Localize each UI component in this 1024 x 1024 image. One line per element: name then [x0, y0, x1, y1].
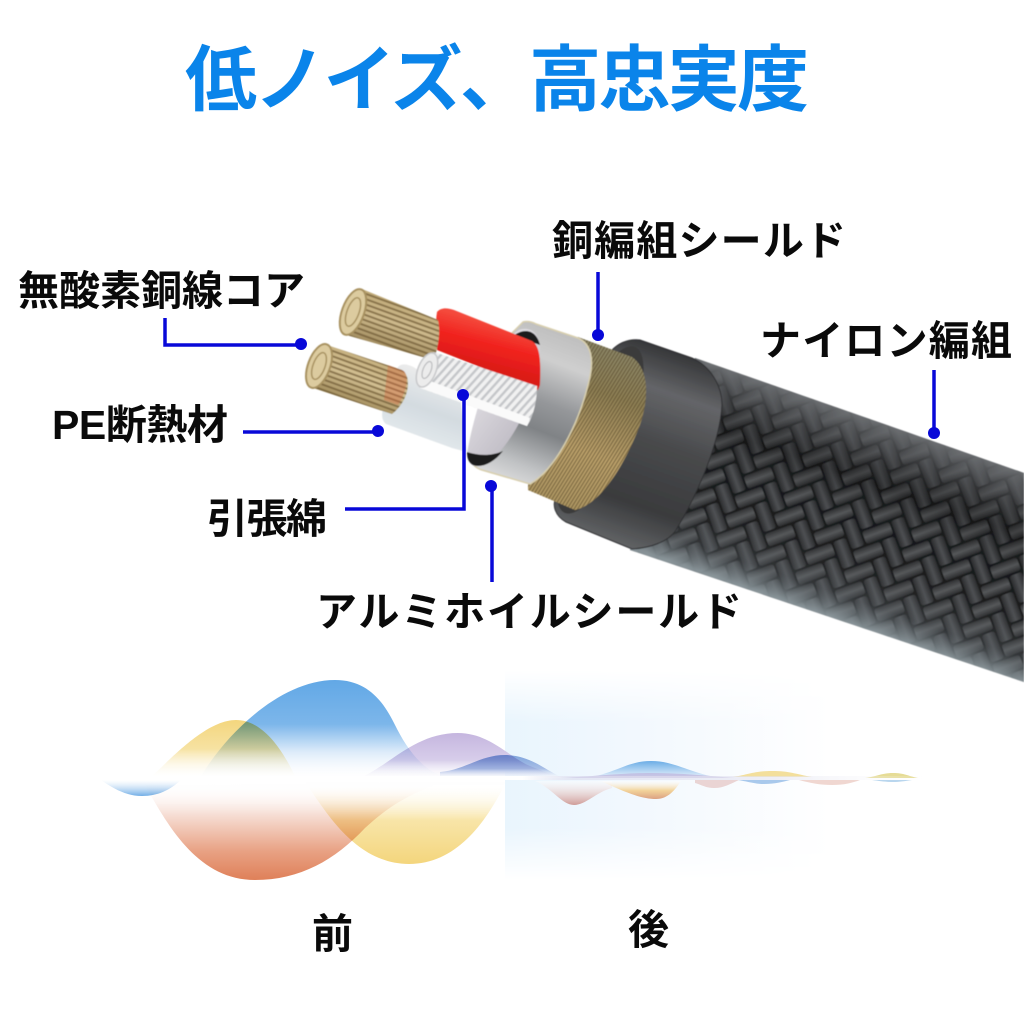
centre light streak	[100, 776, 945, 780]
gold conductor front	[301, 341, 408, 414]
sleeve opening	[539, 336, 661, 524]
gold conductor rear	[334, 286, 439, 360]
cable illustration	[301, 286, 1024, 682]
label: PE insulation	[52, 402, 384, 448]
label: tensile cotton: 引張綿	[207, 496, 327, 542]
label: copper braid shield	[552, 218, 846, 341]
copper braid shield	[528, 337, 646, 510]
label: PE insulation: PE断熱材	[52, 402, 228, 448]
label: nylon braid	[760, 318, 1012, 439]
noise reduction haze	[505, 690, 710, 860]
foil opening	[468, 329, 540, 466]
tensile cotton strand	[412, 350, 537, 426]
label: aluminium foil shield: アルミホイルシールド	[316, 589, 742, 635]
label: aluminium foil shield	[316, 480, 742, 635]
wave after: reduced lobes	[535, 761, 918, 805]
red insulated conductor	[436, 308, 540, 390]
PE insulation tube	[382, 364, 467, 452]
aluminium foil shield	[467, 322, 592, 484]
title: 低ノイズ、高忠実度	[185, 41, 809, 121]
label: nylon braid: ナイロン編組	[760, 318, 1012, 364]
label: oxygen-free copper core	[18, 268, 307, 350]
label: after: 後	[628, 907, 669, 953]
label: oxygen-free copper core: 無酸素銅線コア	[18, 268, 305, 314]
dark gap at bottom of opening	[467, 451, 503, 466]
dark heat-shrink sleeve	[554, 340, 722, 549]
sound wave before and after noise reduction	[104, 680, 918, 880]
wave before: lobes	[101, 680, 563, 880]
dark gap at top of opening	[512, 331, 540, 345]
nylon braid outer jacket	[630, 358, 1024, 682]
label: copper braid shield: 銅編組シールド	[552, 218, 846, 264]
label: before: 前	[312, 911, 353, 957]
label: tensile cotton	[207, 389, 469, 542]
